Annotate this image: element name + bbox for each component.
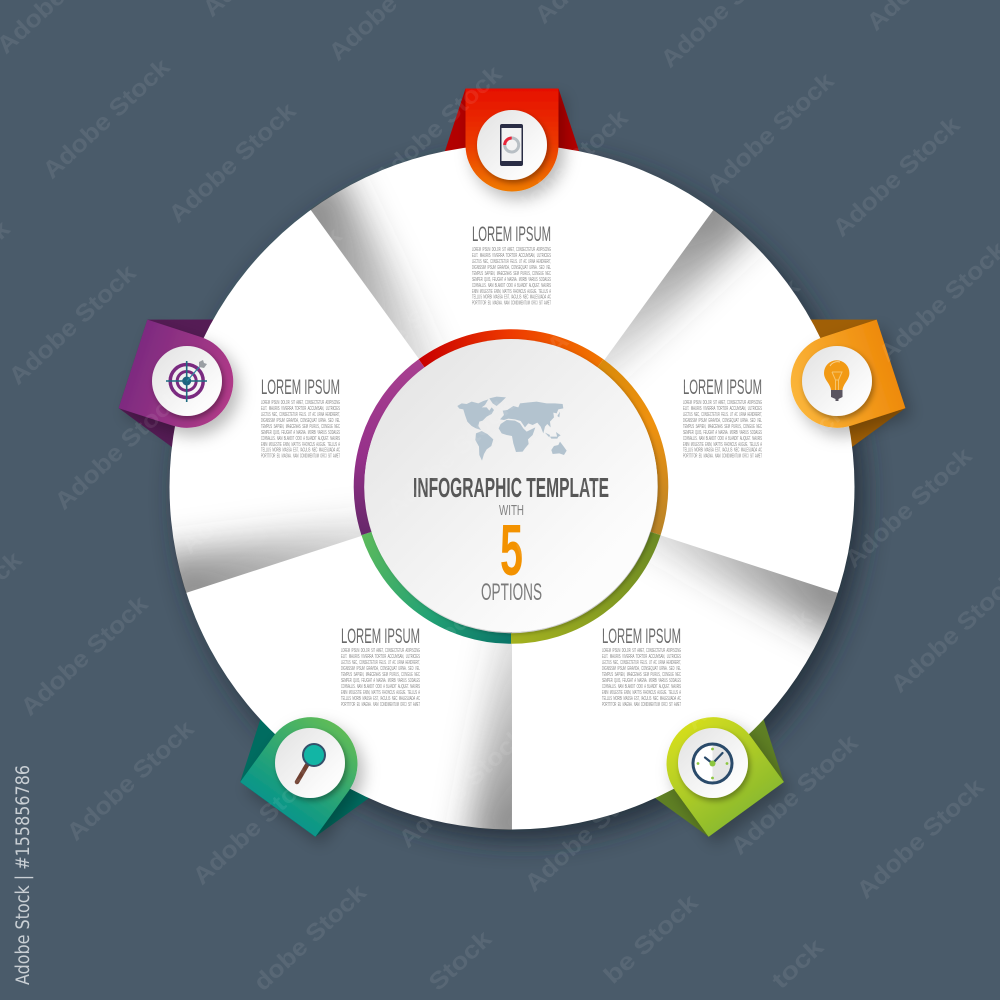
text: LOREM IPSUM DOLOR SIT AMET, CONSECTETUR ADIPISCING bbox=[341, 648, 420, 654]
watermark: Adobe Stock bbox=[62, 715, 200, 846]
text: DIGNISSIM IPSUM GRAVIDA, CONSEQUAT URNA. SED VEL bbox=[341, 666, 420, 672]
watermark: Adobe Stock bbox=[394, 722, 532, 853]
watermark: Adobe Stock bbox=[668, 273, 806, 404]
centre number 5: 5 bbox=[500, 511, 523, 591]
watermark: Adobe Stock bbox=[714, 398, 852, 529]
text block: right segment: ELIT. MAURIS VIVERRA TORTOR ACCUMSAN, ULTRICIES bbox=[683, 406, 762, 412]
text: SEMPER QUIS, FEUGIAT A MAGNA. MORBI VARIUS SODALES bbox=[602, 678, 681, 684]
text: TEMPUS SAPIEN, MAECENAS SEM PURUS, CONGUE NEC bbox=[261, 424, 340, 430]
watermark: Adobe Stock bbox=[852, 773, 990, 904]
text: DIGNISSIM IPSUM GRAVIDA, CONSEQUAT URNA. SED VEL bbox=[683, 418, 762, 424]
text block: lower right segment: LOREM IPSUM bbox=[602, 625, 681, 648]
text: TEMPUS SAPIEN, MAECENAS SEM PURUS, CONGUE NEC bbox=[472, 271, 551, 277]
stock id label: Adobe Stock | #155856786 bbox=[13, 765, 34, 985]
watermark: dobe Stock bbox=[249, 879, 372, 996]
text block: top segment: LOREM IPSUM bbox=[472, 223, 551, 246]
text: TELLUS MORBI MASSA EST, IACULIS NEC MALESUADA AC bbox=[472, 294, 551, 300]
watermark: Adobe Stock bbox=[222, 553, 360, 684]
text block: top segment: ELIT. MAURIS VIVERRA TORTOR ACCUMSAN, ULTRICIES bbox=[472, 253, 551, 259]
text: CONVALLIS. NAM BLANDIT ODIO A BLANDIT ALIQUET. MAURIS bbox=[341, 684, 420, 690]
text: CONVALLIS. NAM BLANDIT ODIO A BLANDIT ALIQUET. MAURIS bbox=[683, 436, 762, 442]
text: SEMPER QUIS, FEUGIAT A MAGNA. MORBI VARIUS SODALES bbox=[261, 430, 340, 436]
tab: lower right lime bbox=[648, 699, 784, 837]
text: CONVALLIS. NAM BLANDIT ODIO A BLANDIT ALIQUET. MAURIS bbox=[472, 283, 551, 289]
text: PORTTITOR EU MAGNA. NAM CONDIMENTUM ORCI SIT AMET bbox=[261, 454, 340, 460]
text block: lower right segment bbox=[602, 625, 681, 708]
text: DIGNISSIM IPSUM GRAVIDA, CONSEQUAT URNA. SED VEL bbox=[602, 666, 681, 672]
text: PORTTITOR EU MAGNA. NAM CONDIMENTUM ORCI SIT AMET bbox=[602, 702, 681, 708]
watermark: Adobe Stock bbox=[702, 67, 840, 198]
text: DIGNISSIM IPSUM GRAVIDA, CONSEQUAT URNA. SED VEL bbox=[261, 418, 340, 424]
icon: target with arrow bbox=[152, 346, 222, 416]
text: TELLUS MORBI MASSA EST, IACULIS NEC MALESUADA AC bbox=[261, 448, 340, 454]
icon: magnifying glass bbox=[275, 728, 345, 798]
text: ENIM MOLESTIE ENIM, MATTIS RHONCUS AUGUE. TELLUS A bbox=[602, 690, 681, 696]
text block: left segment: ELIT. MAURIS VIVERRA TORTOR ACCUMSAN, ULTRICIES bbox=[261, 406, 340, 412]
text: SEMPER QUIS, FEUGIAT A MAGNA. MORBI VARIUS SODALES bbox=[341, 678, 420, 684]
icon: light bulb bbox=[802, 346, 872, 416]
watermark: Adobe Stock bbox=[520, 766, 658, 897]
text: ENIM MOLESTIE ENIM, MATTIS RHONCUS AUGUE. TELLUS A bbox=[683, 442, 762, 448]
watermark: Adobe Stock bbox=[554, 560, 692, 691]
watermark: Adobe Stock bbox=[188, 759, 326, 890]
text: TEMPUS SAPIEN, MAECENAS SEM PURUS, CONGUE NEC bbox=[341, 672, 420, 678]
tab: lower left teal bbox=[240, 699, 376, 837]
text: LOREM IPSUM DOLOR SIT AMET, CONSECTETUR ADIPISCING bbox=[261, 400, 340, 406]
text: LOREM IPSUM DOLOR SIT AMET, CONSECTETUR ADIPISCING bbox=[472, 247, 551, 253]
centre label: with: WITH bbox=[499, 502, 524, 519]
text: TELLUS MORBI MASSA EST, IACULIS NEC MALESUADA AC bbox=[602, 696, 681, 702]
text: ENIM MOLESTIE ENIM, MATTIS RHONCUS AUGUE. TELLUS A bbox=[472, 289, 551, 295]
tab folds behind the circle bbox=[112, 88, 912, 849]
centre label: options: OPTIONS bbox=[481, 579, 542, 606]
text block: right segment: LOREM IPSUM bbox=[683, 376, 762, 399]
text: CONVALLIS. NAM BLANDIT ODIO A BLANDIT ALIQUET. MAURIS bbox=[261, 436, 340, 442]
text: ENIM MOLESTIE ENIM, MATTIS RHONCUS AUGUE. TELLUS A bbox=[261, 442, 340, 448]
watermark: Adobe Stock bbox=[4, 259, 142, 390]
text: DIGNISSIM IPSUM GRAVIDA, CONSEQUAT URNA. SED VEL bbox=[472, 265, 551, 271]
text: TEMPUS SAPIEN, MAECENAS SEM PURUS, CONGUE NEC bbox=[683, 424, 762, 430]
watermark: Adobe Stock bbox=[38, 53, 176, 184]
tab: left purple bbox=[119, 320, 245, 440]
centre title: INFOGRAPHIC TEMPLATE bbox=[413, 472, 609, 503]
text: ENIM MOLESTIE ENIM, MATTIS RHONCUS AUGUE. TELLUS A bbox=[341, 690, 420, 696]
fold shadows on the five segments bbox=[172, 176, 838, 830]
watermark: Adobe Stock bbox=[50, 384, 188, 515]
watermark: Adobe Stock bbox=[370, 60, 508, 191]
watermark: Adobe Stock bbox=[336, 266, 474, 397]
text: SEMPER QUIS, FEUGIAT A MAGNA. MORBI VARIUS SODALES bbox=[472, 277, 551, 283]
text: TELLUS MORBI MASSA EST, IACULIS NEC MALESUADA AC bbox=[683, 448, 762, 454]
text block: left segment: LOREM IPSUM bbox=[261, 376, 340, 399]
text: PORTTITOR EU MAGNA. NAM CONDIMENTUM ORCI SIT AMET bbox=[683, 454, 762, 460]
text block: lower right segment: ELIT. MAURIS VIVERRA TORTOR ACCUMSAN, ULTRICIES bbox=[602, 654, 681, 660]
text: LECTUS NEC, CONSECTETUR FELIS. UT AC URNA HENDRERIT, bbox=[472, 259, 551, 265]
watermark: tock bbox=[767, 933, 830, 994]
text: SEMPER QUIS, FEUGIAT A MAGNA. MORBI VARIUS SODALES bbox=[683, 430, 762, 436]
text: LOREM IPSUM DOLOR SIT AMET, CONSECTETUR ADIPISCING bbox=[683, 400, 762, 406]
watermark: Adobe Stock bbox=[176, 428, 314, 559]
text block: right segment bbox=[683, 376, 762, 460]
world map bbox=[457, 397, 567, 461]
text block: left segment bbox=[261, 376, 340, 460]
watermark: Adobe Stock bbox=[210, 222, 348, 353]
watermark: Adobe Stock bbox=[348, 597, 486, 728]
watermark: Adobe Stock bbox=[828, 111, 966, 242]
text block: lower left segment: ELIT. MAURIS VIVERRA TORTOR ACCUMSAN, ULTRICIES bbox=[341, 654, 420, 660]
text: TEMPUS SAPIEN, MAECENAS SEM PURUS, CONGUE NEC bbox=[602, 672, 681, 678]
text: LECTUS NEC, CONSECTETUR FELIS. UT AC URNA HENDRERIT, bbox=[341, 660, 420, 666]
watermark: Adobe Stock bbox=[840, 442, 978, 573]
text: LOREM IPSUM DOLOR SIT AMET, CONSECTETUR ADIPISCING bbox=[602, 648, 681, 654]
watermark: Adobe Stock bbox=[874, 236, 1000, 367]
text: LECTUS NEC, CONSECTETUR FELIS. UT AC URNA HENDRERIT, bbox=[261, 412, 340, 418]
tab: right orange bbox=[779, 320, 905, 440]
watermark: Adobe Stock bbox=[508, 435, 646, 566]
text block: lower left segment bbox=[341, 625, 420, 708]
text: LECTUS NEC, CONSECTETUR FELIS. UT AC URNA HENDRERIT, bbox=[683, 412, 762, 418]
text: TELLUS MORBI MASSA EST, IACULIS NEC MALESUADA AC bbox=[341, 696, 420, 702]
watermark: Adobe Stock bbox=[382, 391, 520, 522]
centre disc bbox=[364, 339, 658, 632]
text: PORTTITOR EU MAGNA. NAM CONDIMENTUM ORCI SIT AMET bbox=[341, 702, 420, 708]
watermark: Adobe Stock bbox=[542, 229, 680, 360]
watermark: Adobe Stock bbox=[496, 104, 634, 235]
centre colour ring bbox=[359, 335, 663, 638]
watermark: Adobe Stock bbox=[16, 590, 154, 721]
watermark: Adobe Stock bbox=[726, 729, 864, 860]
icon: smartphone with donut chart bbox=[477, 110, 547, 180]
text block: lower left segment: LOREM IPSUM bbox=[341, 625, 420, 648]
main white circle bbox=[170, 144, 854, 830]
watermark: Stock bbox=[424, 925, 497, 996]
text: LECTUS NEC, CONSECTETUR FELIS. UT AC URNA HENDRERIT, bbox=[602, 660, 681, 666]
watermark: Adobe Stock bbox=[164, 97, 302, 228]
icon: clock bbox=[678, 728, 748, 798]
watermark: Adobe Stock bbox=[680, 604, 818, 735]
circle drop shadow bbox=[179, 155, 863, 839]
tab: top red bbox=[466, 88, 558, 192]
text block: top segment bbox=[472, 223, 551, 306]
text: CONVALLIS. NAM BLANDIT ODIO A BLANDIT ALIQUET. MAURIS bbox=[602, 684, 681, 690]
text: PORTTITOR EU MAGNA. NAM CONDIMENTUM ORCI SIT AMET bbox=[472, 300, 551, 306]
watermark: be Stock bbox=[599, 889, 704, 989]
